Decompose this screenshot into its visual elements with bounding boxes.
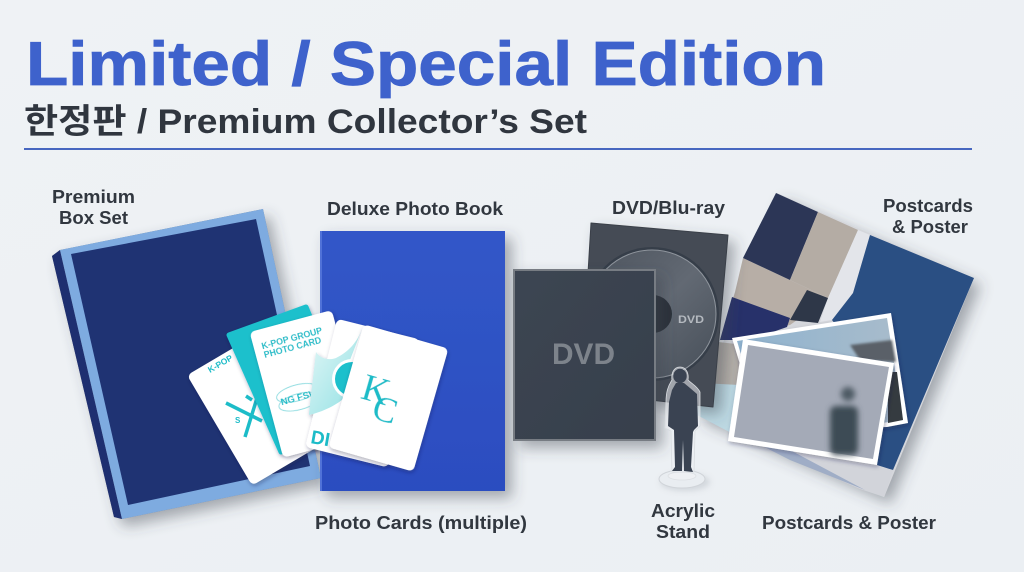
label: deluxe photo book: Deluxe Photo Book: [327, 199, 504, 219]
label: acrylic stand: Acrylic: [651, 501, 715, 521]
card: K-POP with X: K-POP: [206, 352, 235, 375]
card: K-POP with X: [187, 331, 328, 485]
subtitle: 한정판 / Premium Collector’s Set: [24, 103, 587, 141]
label: acrylic stand: Stand: [656, 522, 710, 542]
blurred figure: [830, 387, 858, 455]
panel: DVD case behind with disc: DVD: [678, 314, 704, 326]
label: DVD/Blu-ray: DVD/Blu-ray: [612, 198, 725, 218]
card: K-POP with X: S: [235, 416, 241, 425]
card: KC monogram: K: [357, 366, 395, 414]
figure silhouette: [665, 367, 700, 472]
panel: DVD case behind with disc: [585, 223, 728, 407]
card: K-POP group photo card: K-POP GROUP: [260, 325, 323, 351]
card: wave and DI: [305, 319, 420, 467]
label: postcards and poster top: [883, 196, 973, 237]
label: postcards and poster top: & Poster: [892, 217, 968, 237]
card: KC monogram: [329, 324, 448, 472]
postcard: front photo: [728, 339, 894, 465]
card: KC monogram: C: [368, 387, 402, 432]
label: postcards and poster top: Postcards: [883, 196, 973, 216]
label: postcards and poster bottom: Postcards & Poster: [762, 513, 936, 533]
card: K-POP group photo card: NG FSW: [280, 388, 319, 408]
panel: photo cards: [187, 307, 448, 485]
label: acrylic stand: [651, 501, 715, 542]
card: K-POP group photo card: [250, 310, 365, 458]
panel: DVD front cover: [514, 270, 655, 440]
card: teal: [229, 307, 357, 452]
card: wave and DI: DI: [309, 427, 331, 451]
label: premium box set: [52, 187, 135, 228]
panel: deluxe photo book: [320, 231, 505, 491]
label: photo cards: Photo Cards (multiple): [315, 513, 527, 533]
title: Limited / Special Edition: [26, 30, 826, 99]
panel: acrylic stand: [659, 367, 710, 491]
panel: DVD front cover: DVD: [552, 338, 615, 371]
panel: poster: [697, 193, 974, 497]
panel: premium box set: [52, 209, 321, 519]
label: premium box set: Box Set: [59, 208, 128, 228]
postcard: back photo: [732, 313, 908, 430]
card: K-POP group photo card: PHOTO CARD: [263, 335, 322, 360]
panel: postcards: [728, 313, 908, 465]
label: premium box set: Premium: [52, 187, 135, 207]
